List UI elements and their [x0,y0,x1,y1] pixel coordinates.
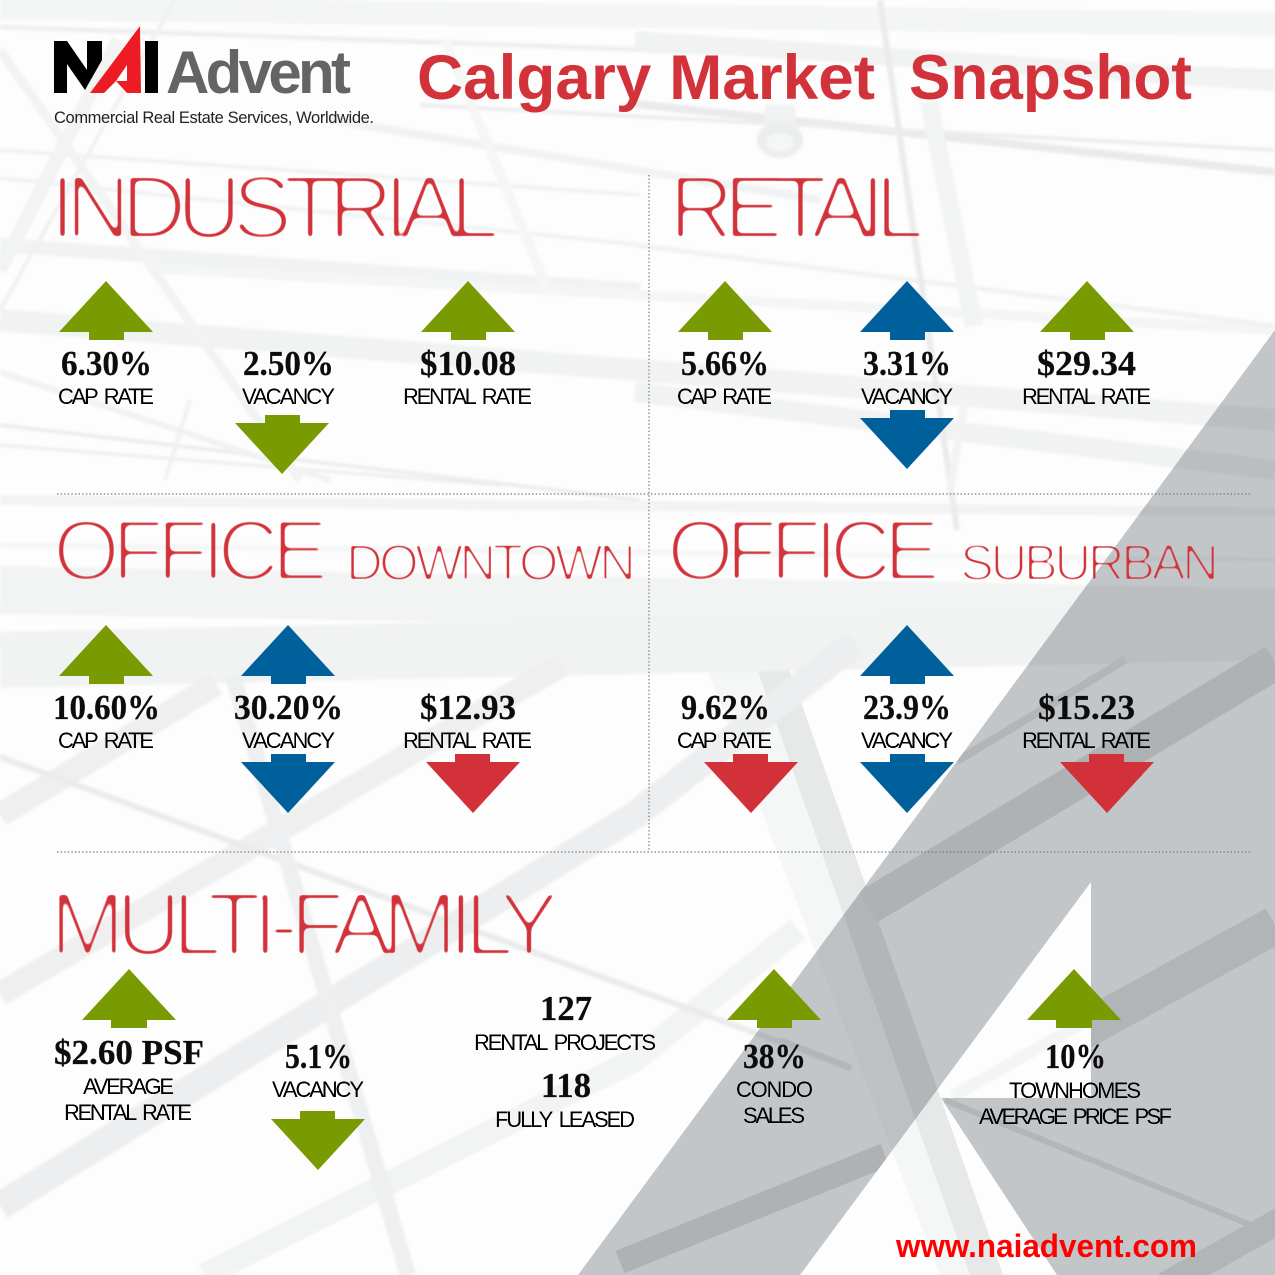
stat: industrial vacancy: 2.50% [243,344,334,383]
stat: downtown vacancy: 30.20% [234,688,343,727]
stat: retail cap rate: CAP RATE [677,384,772,409]
stat: fully leased: 118 [541,1066,591,1105]
logo tagline: Commercial Real Estate Services, Worldwide. [54,109,374,127]
stat: industrial cap rate: CAP RATE [58,384,154,409]
stat: retail vacancy: VACANCY [861,384,953,409]
panel: office downtown [53,503,636,813]
stat: average rental rate: AVERAGE [83,1074,174,1099]
panel: multi-family [50,875,1172,1170]
panel: retail [669,158,1151,469]
stat: suburban cap rate [677,688,798,813]
logo mark I [145,41,158,93]
stat: multi-family vacancy: VACANCY [272,1077,364,1102]
heading: office downtown: DOWNTOWN [346,534,636,591]
stat: retail cap rate: 5.66% [681,344,769,383]
panel: office suburban [667,503,1219,813]
stat: fully leased [495,1066,635,1132]
stat: industrial vacancy: VACANCY [242,384,335,409]
stat: condo sales: SALES [743,1103,805,1128]
website url: www.naiadvent.com [895,1228,1197,1264]
logo word Advent: Advent [166,39,351,106]
stat: downtown rental rate: $12.93 [420,688,516,727]
logo: NAI Advent [54,26,374,127]
stat: industrial rental rate [403,281,532,409]
stat: industrial cap rate: 6.30% [61,344,152,383]
stat: industrial cap rate [58,281,154,409]
title: Snapshot [909,43,1192,113]
heading: multi-family: MULTI-FAMILY [50,875,559,975]
logo mark N [54,41,102,93]
stat: rental projects [474,989,656,1055]
dotted dividers [57,175,1250,852]
stat: downtown rental rate [403,688,532,813]
heading: office suburban [667,503,1219,599]
stat: average rental rate [54,969,204,1125]
stat: retail rental rate: $29.34 [1037,344,1136,383]
stat: average rental rate: $2.60 PSF [54,1033,204,1072]
stat: suburban vacancy: 23.9% [863,688,951,727]
stat: condo sales [727,969,821,1128]
stat: downtown vacancy [234,625,343,813]
stat: retail cap rate [677,281,772,409]
stat: suburban cap rate: 9.62% [681,688,770,727]
stat: rental projects: RENTAL PROJECTS [474,1030,656,1055]
stat: suburban vacancy: VACANCY [861,728,953,753]
stat: downtown vacancy: VACANCY [242,728,335,753]
stat: suburban rental rate: RENTAL RATE [1022,728,1151,753]
stat: fully leased: FULLY LEASED [495,1107,635,1132]
stat: downtown cap rate: 10.60% [53,688,160,727]
title: Calgary Market [417,43,875,113]
heading: office suburban: OFFICE [667,503,941,599]
stat: downtown cap rate [53,625,160,753]
stat: townhomes average price: AVERAGE PRICE PSF [979,1104,1172,1129]
security camera [757,105,803,158]
stat: downtown rental rate: RENTAL RATE [403,728,532,753]
stat: multi-family vacancy: 5.1% [285,1037,352,1076]
panel: industrial [50,158,532,474]
heading: office downtown: OFFICE [53,503,329,599]
stat: townhomes average price: 10% [1045,1037,1106,1076]
stat: average rental rate: RENTAL RATE [64,1100,192,1125]
big pale diagonal girder [688,620,1003,1275]
stat: retail vacancy: 3.31% [863,344,951,383]
heading: retail: RETAIL [669,158,925,258]
logo mark A [90,26,141,93]
stat: suburban vacancy [860,625,954,813]
darker beams seen through grey overlay [620,660,1275,1275]
stat: suburban cap rate: CAP RATE [677,728,772,753]
heading: office suburban: SUBURBAN [960,534,1219,591]
title [417,43,1192,113]
stat: multi-family vacancy [271,1037,365,1170]
stat: retail rental rate: RENTAL RATE [1022,384,1151,409]
stat: townhomes average price: TOWNHOMES [1009,1078,1141,1103]
grey angular overlay shape [578,330,1275,1275]
heading: industrial: INDUSTRIAL [50,158,500,258]
stat: condo sales: 38% [743,1037,806,1076]
stat: retail rental rate [1022,281,1151,409]
stat: industrial rental rate: RENTAL RATE [403,384,532,409]
stat: suburban rental rate [1022,688,1154,813]
stat: townhomes average price [979,969,1172,1129]
stat: suburban rental rate: $15.23 [1038,688,1135,727]
stat: retail vacancy [860,281,954,469]
stat: industrial rental rate: $10.08 [420,344,516,383]
stat: condo sales: CONDO [736,1077,813,1102]
heading: office downtown [53,503,636,599]
stat: rental projects: 127 [540,989,592,1028]
stat: downtown cap rate: CAP RATE [58,728,154,753]
stat: industrial vacancy [235,344,335,474]
